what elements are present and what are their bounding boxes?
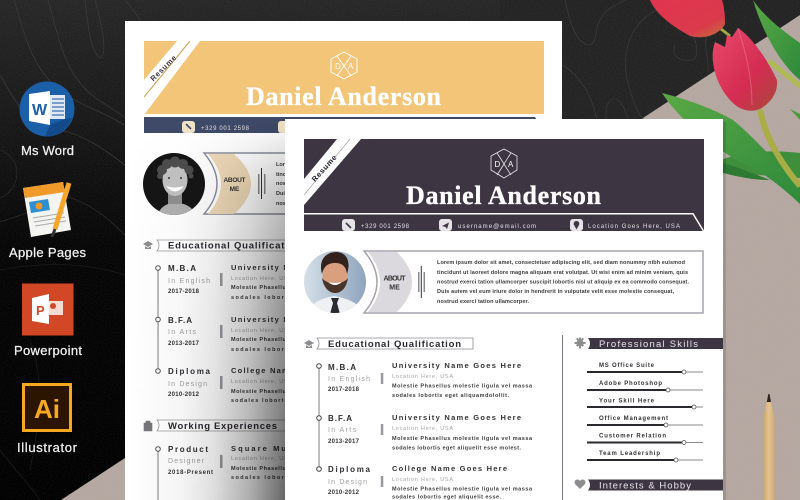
skill bars: Your Skill Here	[599, 398, 655, 404]
front logo: A	[508, 160, 514, 169]
back education section: Diploma	[168, 367, 211, 376]
about text: nostrud exerci tation ullamcorper.	[437, 299, 529, 305]
back contact bar	[144, 117, 545, 133]
cast shadow on back page	[172, 129, 285, 500]
contact: phone: +329 001 2598	[361, 224, 410, 230]
entry: B.F.A: Molestie Phasellus molestie ligula vel massa	[392, 436, 533, 442]
back work section: sodales lobortis eget aliquam	[231, 475, 348, 481]
about label: ABOUT	[384, 276, 406, 282]
skill bars: Adobe Photoshop	[599, 381, 662, 387]
back education section	[143, 240, 372, 404]
Powerpoint	[14, 284, 82, 358]
back education section: Molestie Phasellus molestie ligula vel massa	[231, 337, 372, 343]
education section	[304, 338, 533, 500]
skills heading: Professional Skills	[599, 339, 698, 350]
back education section: Location Here, USA	[231, 276, 292, 282]
back work section: Working Experiences	[168, 421, 277, 432]
about block	[364, 251, 703, 313]
icon: gear	[574, 338, 586, 348]
icon: Word: W	[32, 102, 48, 119]
back logo	[331, 52, 357, 79]
entry: M.B.A: University Name Goes Here	[392, 361, 521, 370]
back work section: Molestie Phasellus molestie ligula vel massa	[231, 466, 372, 472]
back header	[144, 41, 544, 115]
icon: heart	[575, 480, 585, 489]
back education section: 2017-2018	[168, 289, 200, 295]
skill bars: Customer Relation	[599, 434, 666, 440]
pencil	[763, 394, 774, 500]
education heading: Educational Qualification	[328, 339, 461, 350]
entry: Diploma: Molestie Phasellus molestie ligula vel massa	[392, 486, 533, 492]
contact: email	[439, 219, 536, 231]
interests section	[575, 480, 723, 492]
Ms Word: Ms Word	[21, 143, 74, 158]
skill bars: MS Office Suite	[599, 363, 655, 369]
back about block: ME	[230, 186, 240, 193]
back education section: Location Here, USA	[231, 379, 292, 385]
skill bars: Team Leadership	[599, 451, 660, 457]
back work section: Location Here, USA	[231, 456, 292, 462]
about text: Lorem ipsum dolor sit amet, consectetuer adipiscing elit, sed diam nonummy nibh euismod	[437, 260, 685, 266]
entry: Diploma: In Design	[328, 479, 367, 486]
back education section: University Name Goes Here	[231, 315, 360, 324]
upper leaf	[753, 0, 800, 80]
entry: B.F.A	[328, 413, 533, 452]
column divider	[562, 335, 563, 500]
entry: B.F.A: 2013-2017	[328, 439, 360, 445]
back ribbon: Resume	[148, 53, 178, 83]
right small leaf	[790, 109, 800, 120]
front name: Daniel Anderson	[406, 181, 602, 210]
flower 2	[713, 28, 777, 111]
back work section: 2018-Present	[168, 470, 213, 476]
entry: M.B.A: Location Here, USA	[392, 374, 453, 380]
back work section	[144, 420, 372, 500]
back work section: Product	[168, 445, 208, 454]
entry: M.B.A: In English	[328, 376, 370, 383]
back work section: Square Multimedia	[231, 444, 332, 453]
back education section: University Name Goes Here	[231, 263, 360, 272]
back name: Daniel Anderson	[246, 82, 442, 111]
back about block: ABOUT	[224, 177, 246, 184]
back education section: In Design	[168, 381, 207, 388]
back education section: In English	[168, 278, 210, 285]
entry: M.B.A: 2017-2018	[328, 387, 360, 393]
back education section: Educational Qualification	[168, 240, 301, 252]
contact: phone	[342, 219, 410, 231]
contact: location: Location Goes Here, USA	[588, 224, 680, 230]
Illustrator: Illustrator	[17, 440, 78, 455]
back education section: Molestie Phasellus molestie ligula vel massa	[231, 285, 372, 291]
back ribbon	[144, 41, 200, 115]
interests heading: Interests & Hobby	[599, 480, 691, 492]
icon: PowerPoint: P	[36, 303, 45, 318]
contact: email: username@email.com	[458, 224, 536, 230]
front logo: D	[494, 160, 500, 169]
back education section: sodales lobortis eget aliquam	[231, 295, 348, 301]
back education section: In Arts	[168, 329, 196, 336]
stems	[760, 110, 800, 186]
big leaf	[662, 93, 800, 204]
Apple Pages: Apple Pages	[9, 245, 86, 260]
back portrait	[143, 153, 205, 215]
front header	[304, 139, 704, 231]
back education section: Molestie Phasellus molestie ligula vel massa	[231, 389, 372, 395]
back resume page (gold)	[125, 21, 562, 500]
entry: Diploma: College Name Goes Here	[392, 464, 507, 473]
about text	[437, 260, 689, 305]
background: charcoal upper right	[500, 0, 800, 135]
entry: B.F.A: B.F.A	[328, 414, 352, 423]
back about block: nostrud	[276, 201, 296, 207]
tulips and leaves	[650, 0, 800, 204]
contact: location	[570, 219, 680, 231]
skill bars	[587, 363, 703, 462]
back education section: 2010-2012	[168, 392, 200, 398]
entry: Diploma: Diploma	[328, 465, 371, 474]
about text: nostrud exerci tation ullamcorper suscipit lobortis nisl ut aliquip ex ea commodo consequat.	[437, 280, 689, 286]
back contact bar: +329 001 2598	[201, 126, 250, 132]
Powerpoint: Powerpoint	[14, 343, 82, 358]
back logo: D	[335, 62, 341, 71]
back about block: tincidunt	[276, 172, 299, 178]
entry: M.B.A: M.B.A	[328, 363, 356, 372]
flower 1	[650, 0, 725, 37]
icon: Pages	[23, 182, 71, 237]
icon: graduation cap	[143, 241, 153, 249]
back education section: sodales lobortis eget aliquam	[231, 398, 340, 404]
about label	[384, 276, 406, 292]
interests heading	[588, 480, 723, 492]
back about block: nostrud	[276, 181, 296, 187]
entry: M.B.A: Molestie Phasellus molestie ligula vel massa	[392, 384, 533, 390]
back work section: Designer	[168, 458, 205, 465]
back about block	[204, 153, 560, 214]
software list	[9, 82, 86, 455]
icon: Illustrator: Ai	[34, 394, 60, 424]
entry: B.F.A: Location Here, USA	[392, 426, 453, 432]
about text: tincidunt ut laoreet dolore magna aliquam erat volutpat. Ut wisi enim ad minim veniam, quis	[437, 270, 688, 276]
header rule	[304, 214, 704, 231]
entry: Diploma	[328, 464, 533, 500]
back about block: Duis autem	[276, 191, 306, 197]
Illustrator	[17, 384, 78, 455]
back education section: B.F.A	[168, 316, 192, 325]
lower leaves	[715, 151, 800, 178]
entry: M.B.A: sodales lobortis eget aliquamdolollit.	[392, 393, 509, 399]
back education section: College Name Goes Here	[231, 366, 346, 375]
about label: ME	[389, 284, 400, 292]
back education section: 2013-2017	[168, 341, 200, 347]
back logo: A	[348, 62, 354, 71]
front portrait	[304, 251, 366, 318]
front resume page (dark)	[285, 119, 723, 500]
entry: B.F.A: In Arts	[328, 427, 356, 434]
entry: B.F.A: sodales lobortis eget aliquelit esse molest.	[392, 446, 521, 452]
entry: Diploma: 2010-2012	[328, 490, 360, 496]
back education section: sodales lobortis eget aliquam	[231, 347, 348, 353]
back education section: M.B.A	[168, 264, 196, 273]
front ribbon: Resume	[310, 153, 339, 184]
about text: Duis autem vel eum iriure dolor in hendrerit in vulputate velit esse molestie consequat,	[437, 289, 674, 295]
icon: briefcase	[144, 421, 152, 431]
front ribbon	[304, 139, 361, 205]
front page shadow	[723, 122, 726, 500]
entry: B.F.A: University Name Goes Here	[392, 413, 521, 422]
skills section	[574, 338, 723, 462]
Apple Pages	[9, 182, 86, 260]
back education section: Location Here, USA	[231, 328, 292, 334]
skills heading	[588, 338, 723, 350]
skill bars: Office Management	[599, 416, 668, 422]
entry: M.B.A	[328, 361, 533, 399]
back about block: Lorem ipsum	[276, 162, 311, 168]
entry: Diploma: Location Here, USA	[392, 477, 453, 483]
icon: graduation cap	[304, 340, 314, 348]
Ms Word	[20, 82, 74, 158]
front logo	[491, 149, 517, 178]
